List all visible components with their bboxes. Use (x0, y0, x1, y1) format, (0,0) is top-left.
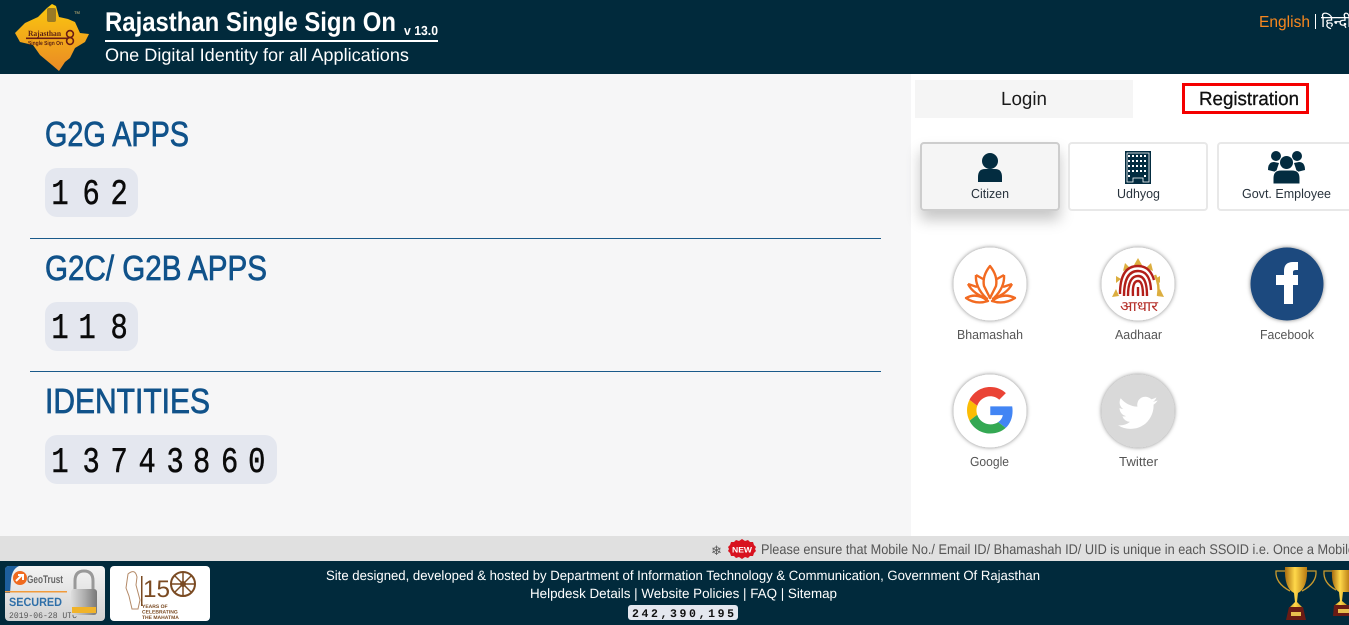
badge: GeoTrust secured (5, 566, 105, 621)
footer credit: Site designed, developed & hosted by Department of Information Technology & Communication, Government Of Rajasthan (326, 568, 1040, 583)
user type: govt employee: Govt. Employee (1242, 186, 1331, 201)
badge: 150 years of celebrating the Mahatma (110, 566, 210, 621)
badge: 150 years of celebrating the Mahatma: THE MAHATMA (142, 615, 179, 621)
stat: G2G apps: G2G APPS (45, 115, 189, 154)
stat: G2C G2B apps: G2C/ G2B APPS (45, 249, 267, 288)
icon: Google G (967, 387, 1013, 434)
stat: G2G apps (45, 115, 189, 217)
notice ticker (0, 536, 1349, 561)
stat: identities (45, 382, 277, 484)
language switch (1259, 12, 1349, 31)
stat: identities: 13743860 (51, 442, 265, 483)
stat: G2C G2B apps (45, 249, 267, 351)
footer links: Helpdesk Details | Website Policies | FAQ | Sitemap (530, 586, 837, 601)
login option: Facebook (1250, 248, 1324, 342)
icon: Aadhaar fingerprint: आधार (1120, 298, 1158, 314)
visitor counter: 242,390,195 (632, 608, 734, 621)
logo: Rajasthan map: Rajasthan (28, 29, 62, 38)
icon: new badge: NEW (732, 546, 752, 554)
icon: snowflake: ❄ (711, 544, 722, 559)
site title: Rajasthan Single Sign On (105, 7, 396, 37)
icon: bird (1118, 397, 1158, 429)
login option: Twitter: Twitter (1119, 454, 1159, 469)
header bar (0, 0, 1349, 74)
stat: G2G apps: 162 (51, 174, 128, 215)
icon: lotus (966, 266, 1015, 302)
user type: citizen (921, 143, 1059, 210)
footer (0, 561, 1349, 625)
trophy 2 (1324, 570, 1349, 616)
login option: Facebook: Facebook (1260, 327, 1314, 342)
badge: GeoTrust secured: GeoTrust (27, 574, 63, 586)
version: v 13.0 (404, 23, 438, 38)
icon: new badge (728, 539, 756, 559)
registration tab: Registration (1199, 89, 1299, 110)
language switch: English (1259, 14, 1310, 31)
user type: govt employee (1218, 143, 1349, 210)
badge: 150 years of celebrating the Mahatma: 15 (143, 576, 170, 603)
stat: G2C G2B apps: 118 (51, 308, 128, 349)
badge: GeoTrust secured: SECURED (9, 595, 62, 609)
login option: Bhamashah: Bhamashah (957, 327, 1023, 342)
badge: 150 years of celebrating the Mahatma: CELEBRATING (142, 610, 178, 616)
icon: building (1125, 151, 1151, 184)
logo: Rajasthan map: TM (74, 10, 80, 15)
stats panel (0, 74, 911, 536)
badge: GeoTrust secured: 2019-06-28 UTC (9, 611, 77, 621)
stat: identities: IDENTITIES (45, 382, 210, 421)
tagline: One Digital Identity for all Applications (105, 45, 409, 65)
registration tab (1184, 84, 1308, 112)
login option: Bhamashah (954, 248, 1026, 342)
user type: citizen: Citizen (971, 186, 1009, 201)
user type: udhyog: Udhyog (1117, 186, 1160, 201)
logo: Rajasthan map (15, 4, 89, 71)
login tab (915, 80, 1133, 118)
logo: Rajasthan map: Single Sign On (28, 40, 63, 47)
login option: Aadhaar: Aadhaar (1115, 327, 1163, 342)
login tab: Login (1001, 89, 1047, 110)
login option: Google: Google (970, 454, 1009, 469)
login option: Aadhaar (1102, 248, 1174, 342)
icon: person (978, 153, 1002, 182)
icon: f (1276, 262, 1298, 304)
icon: people group (1268, 151, 1305, 184)
badge: 150 years of celebrating the Mahatma: YEARS OF (142, 604, 168, 610)
login option: Twitter (1102, 374, 1174, 469)
login option: Google (954, 374, 1026, 469)
trophy 1 (1276, 567, 1316, 620)
user type: udhyog (1069, 143, 1207, 210)
